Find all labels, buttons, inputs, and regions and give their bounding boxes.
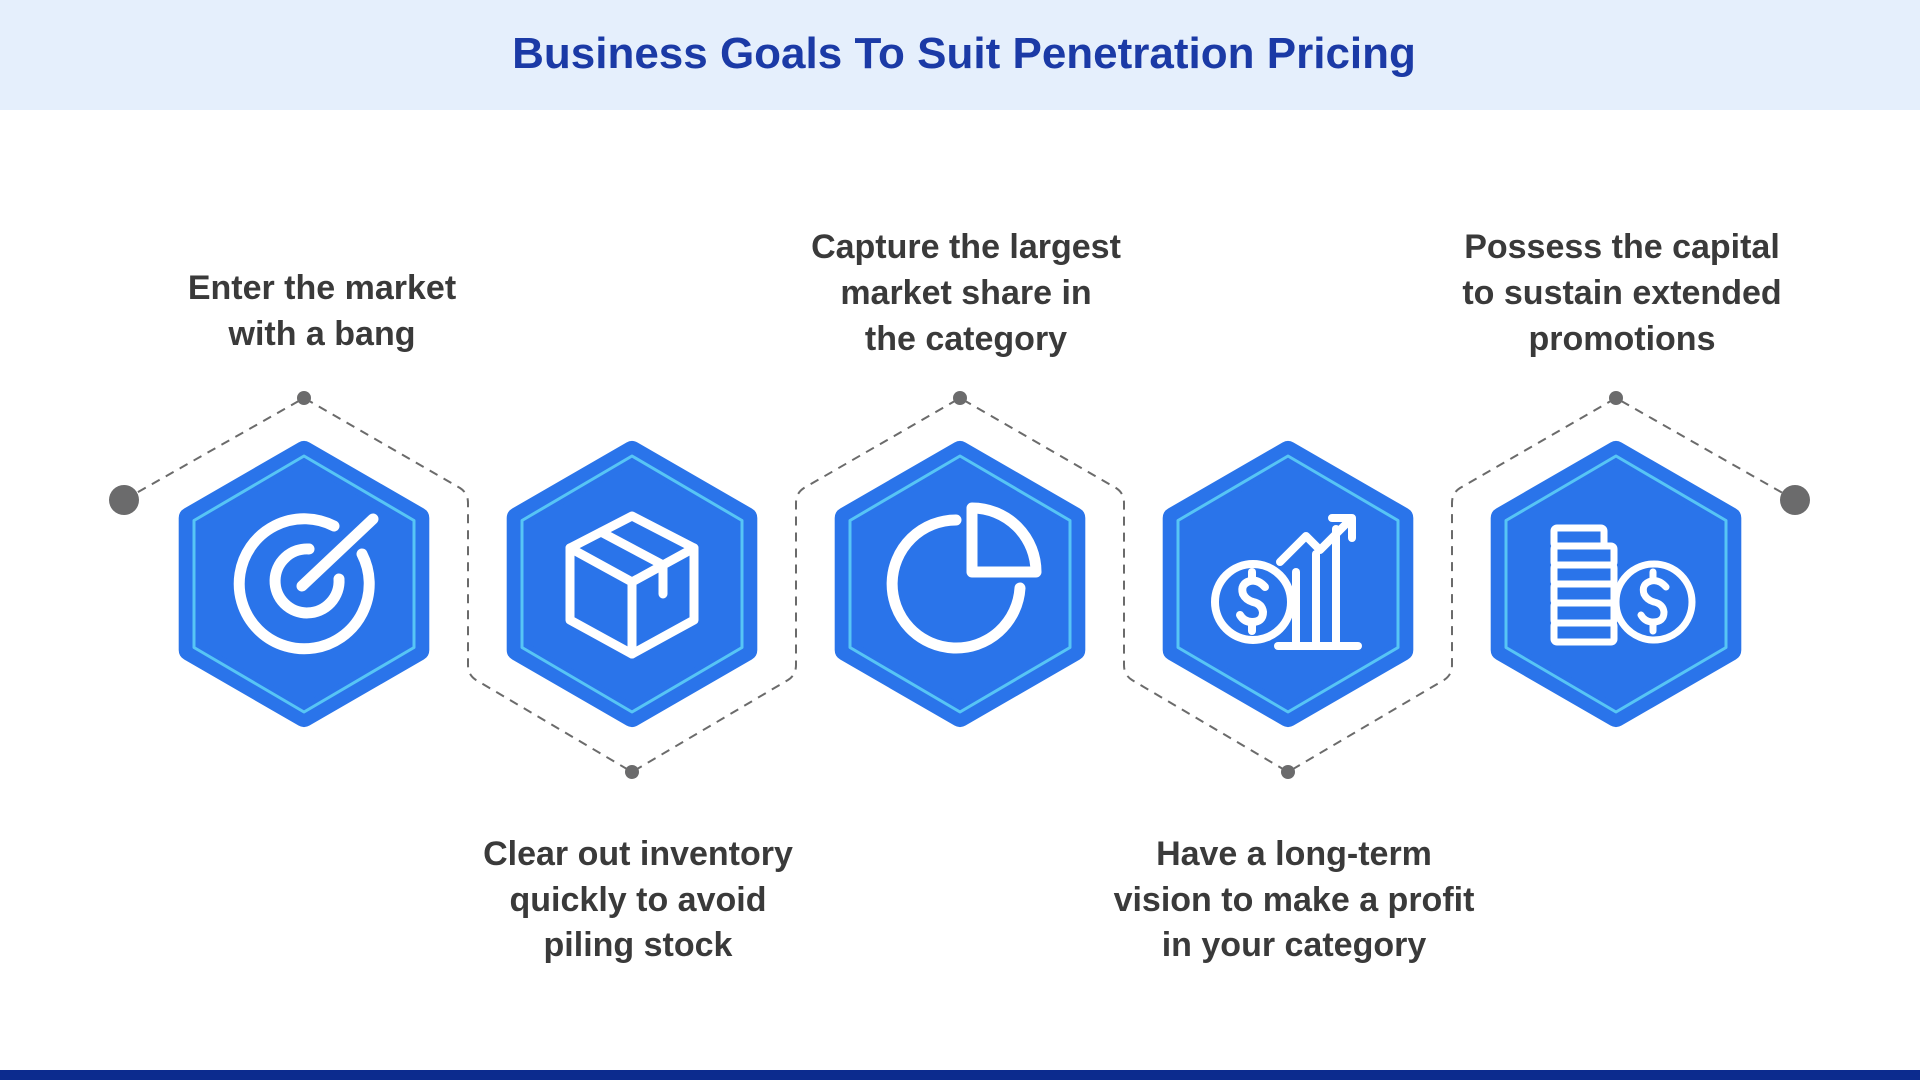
- hexagon 1: target icon: [190, 452, 418, 716]
- label 2: piling stock: [544, 926, 733, 964]
- label 4: vision to make a profit: [1114, 881, 1474, 919]
- dashed connector path: [124, 398, 1795, 772]
- label 3: Capture the largest: [811, 228, 1121, 266]
- label 5: to sustain extended: [1462, 274, 1782, 312]
- label 5: promotions: [1529, 320, 1715, 358]
- label 4: in your category: [1162, 926, 1426, 964]
- footer bar: [0, 1070, 1920, 1080]
- title: Business Goals To Suit Penetration Pricing: [512, 29, 1416, 78]
- connector dots: [109, 391, 1810, 779]
- label 1: Enter the market: [188, 269, 456, 307]
- hexagon 3: pie chart icon: [846, 452, 1074, 716]
- hexagon 4: growth coin icon: [1174, 452, 1402, 716]
- label 4: [1114, 835, 1474, 964]
- header band: [0, 0, 1920, 110]
- label 2: Clear out inventory: [483, 835, 793, 873]
- label 1: [188, 269, 456, 353]
- label 3: the category: [865, 320, 1067, 358]
- label 3: market share in: [840, 274, 1092, 312]
- label 5: Possess the capital: [1464, 228, 1780, 266]
- hexagon 5: coin stack icon: [1502, 452, 1730, 716]
- hexagon 2: box icon: [518, 452, 746, 716]
- label 1: with a bang: [228, 315, 416, 353]
- label 5: [1462, 228, 1782, 358]
- label 2: [483, 835, 793, 964]
- label 2: quickly to avoid: [510, 881, 766, 919]
- label 4: Have a long-term: [1156, 835, 1432, 873]
- label 3: [811, 228, 1121, 358]
